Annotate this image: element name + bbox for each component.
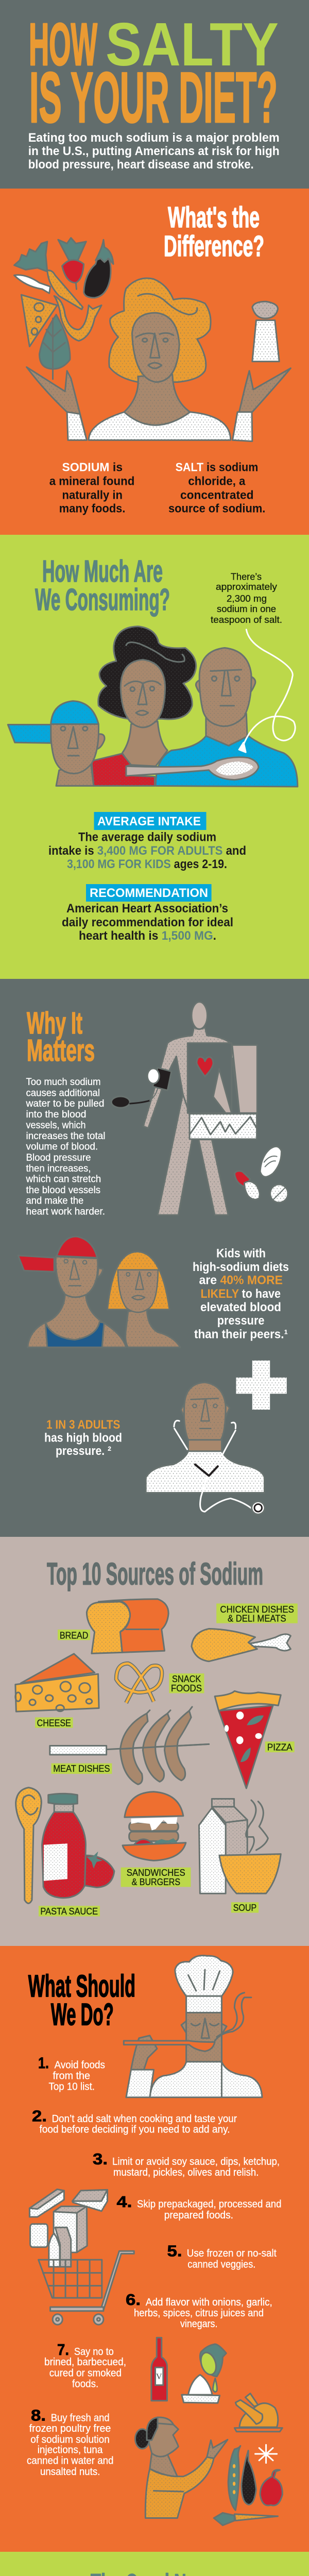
text: sodium definition: naturally in: [62, 488, 123, 501]
text: explanation: into the blood: [26, 1109, 87, 1120]
text: kids statistic: than their peers.¹: [194, 1327, 288, 1342]
heading: how much are we consuming: [35, 554, 170, 617]
heading: why it matters: [27, 1006, 95, 1067]
text: explanation: and make the: [26, 1195, 83, 1206]
callout: average intake: intake is 3,400 MG FOR ADULTS and: [48, 844, 246, 858]
step 1: 1.: [38, 2054, 49, 2072]
icon: salt shaker: [252, 301, 279, 362]
step 8: unsalted nuts.: [40, 2466, 100, 2478]
step 5: [167, 2242, 277, 2270]
text: explanation: which can stretch: [26, 1174, 101, 1185]
label: bread: BREAD: [60, 1630, 88, 1640]
text: kids statistic: Kids with: [216, 1247, 266, 1260]
illustration: family with spoon: [8, 626, 298, 787]
text: explanation: then increases,: [26, 1163, 91, 1174]
callout: teaspoon sodium: teaspoon of salt.: [211, 615, 282, 625]
step 1: Avoid foods: [55, 2059, 105, 2071]
illustration: chef tasting: [124, 1956, 262, 2097]
panel: why it matters: [0, 979, 309, 1537]
text: adults statistic: [44, 1418, 122, 1458]
icon: medical cross: [236, 1361, 287, 1410]
panel: what's the difference: [0, 189, 309, 535]
panel: the good news: [0, 2552, 309, 2576]
callout: recommendation: RECOMMENDATION: [90, 886, 208, 900]
icon: meat skewer: [50, 1707, 209, 1784]
step 2: [32, 2107, 237, 2136]
step 6: vinegars.: [180, 2318, 217, 2330]
text: kids statistic: pressure: [217, 1314, 265, 1328]
heading: what's the difference: [164, 201, 264, 263]
callout: average intake: The average daily sodium: [78, 831, 216, 844]
label: pasta sauce: PASTA SAUCE: [40, 1906, 98, 1917]
step 6: 6.: [126, 2291, 141, 2309]
step 6: [126, 2291, 272, 2330]
callout: teaspoon sodium: 2,300 mg: [227, 594, 267, 604]
intro text: [28, 131, 280, 172]
step 4: Skip prepackaged, processed and: [137, 2198, 281, 2210]
heading: how much are we consuming: How Much Are: [42, 554, 163, 588]
callout: teaspoon sodium: There’s: [231, 572, 262, 582]
label: snack foods: FOODS: [171, 1683, 202, 1693]
step 3: 3.: [93, 2150, 108, 2168]
step 6: Add flavor with onions, garlic,: [146, 2296, 272, 2308]
arrow: squiggle to spoon: [239, 630, 295, 752]
step 7: Say no to: [74, 2346, 114, 2358]
text: adults statistic: pressure. ²: [56, 1444, 111, 1458]
text: salt definition: [168, 461, 265, 515]
label: soup: SOUP: [233, 1903, 256, 1913]
label: sandwiches and burgers: & BURGERS: [132, 1877, 180, 1887]
text: sodium definition: [49, 461, 134, 515]
step 1: Top 10 list.: [48, 2080, 95, 2093]
label: snack foods: [169, 1673, 204, 1693]
step 8: Buy fresh and: [51, 2412, 110, 2424]
illustration: doctor with stethoscope: [146, 1382, 265, 1514]
heading: why it matters: Why It: [27, 1006, 82, 1040]
icon: soup and carton: [199, 1799, 281, 1893]
label: sandwiches and burgers: SANDWICHES: [127, 1868, 185, 1878]
icon: burger: [123, 1792, 186, 1860]
text: kids statistic: elevated blood: [200, 1300, 281, 1314]
step 4: prepared foods.: [164, 2209, 233, 2221]
step 2: Don’t add salt when cooking and taste your: [52, 2113, 237, 2125]
icon: bread: [87, 1599, 168, 1653]
title: [29, 10, 279, 138]
intro text: Eating too much sodium is a major problem: [28, 131, 280, 145]
step 2: 2.: [32, 2107, 47, 2125]
icon: frozen vegetables: [214, 2445, 282, 2526]
icon: vinegar bottle: [151, 2337, 167, 2401]
panel: how much are we consuming: [0, 535, 309, 979]
callout: average intake: [48, 812, 246, 871]
step 6: herbs, spices, citrus juices and: [134, 2307, 264, 2319]
callout: teaspoon sodium: [211, 572, 282, 625]
step 5: Use frozen or no-salt: [187, 2247, 277, 2259]
step 1: from the: [53, 2070, 90, 2082]
step 7: [44, 2341, 126, 2390]
step 8: of sodium solution: [30, 2433, 110, 2445]
heading: why it matters: Matters: [27, 1033, 95, 1067]
callout: average intake: 3,100 MG FOR KIDS ages 2-19.: [67, 857, 227, 871]
text: kids statistic: are 40% MORE: [199, 1274, 283, 1287]
text: explanation: [26, 1076, 105, 1217]
text: sodium definition: a mineral found: [49, 474, 134, 487]
step 7: cured or smoked: [49, 2367, 122, 2379]
step 3: Limit or avoid soy sauce, dips, ketchup,: [112, 2156, 280, 2167]
step 7: foods.: [72, 2378, 98, 2390]
heading: what should we do: What Should: [28, 1969, 135, 2003]
panel: top 10 sources: [0, 1537, 309, 1946]
text: kids statistic: high-sodium diets: [193, 1260, 289, 1274]
text: sodium definition: many foods.: [59, 502, 125, 515]
illustration: woman shopping profile: [135, 2417, 228, 2518]
icon: natural foods: [14, 238, 113, 379]
intro text: blood pressure, heart disease and stroke.: [28, 158, 254, 172]
step 3: mustard, pickles, olives and relish.: [113, 2166, 259, 2178]
text: adults statistic: has high blood: [44, 1431, 122, 1445]
heading: how much are we consuming: We Consuming?: [35, 583, 170, 617]
step 1: [38, 2054, 105, 2093]
icon: pasta sauce with spoon and tomato: [16, 1788, 114, 1903]
text: explanation: water to be pulled: [26, 1098, 104, 1109]
icon: vinegar bottle: V: [156, 2372, 162, 2381]
icon: cheese: [15, 1654, 99, 1711]
heading: what should we do: We Do?: [51, 1997, 114, 2032]
callout: teaspoon sodium: approximately: [216, 582, 277, 592]
illustration: shopping cart: [29, 2189, 134, 2325]
label: snack foods: SNACK: [172, 1674, 201, 1684]
step 5: 5.: [167, 2242, 182, 2260]
text: salt definition: SALT is sodium: [176, 461, 258, 474]
illustration: kids: [18, 1236, 180, 1347]
step 8: [27, 2406, 113, 2478]
text: explanation: volume of blood.: [26, 1141, 98, 1152]
step 8: 8.: [31, 2406, 46, 2425]
step 8: canned in water and: [27, 2455, 113, 2467]
callout: recommendation: American Heart Association’s: [66, 902, 228, 916]
label: sandwiches and burgers: [121, 1868, 191, 1887]
label: chicken dishes and deli meats: [216, 1603, 298, 1624]
text: sodium definition: SODIUM is: [62, 461, 123, 474]
step 2: food before deciding if you need to add any.: [39, 2124, 230, 2136]
icon: lime and juicer: [182, 2344, 226, 2403]
text: adults statistic: 1 IN 3 ADULTS: [46, 1418, 120, 1432]
icon: roast turkey: [234, 2394, 282, 2432]
panel: title header: [0, 0, 309, 189]
label: meat dishes: MEAT DISHES: [53, 1764, 110, 1774]
callout: recommendation: [62, 884, 233, 943]
icon: pretzel: [116, 1664, 162, 1703]
text: explanation: the blood vessels: [26, 1184, 100, 1196]
icon: pills: [234, 1146, 288, 1202]
heading: what should we do: [28, 1969, 135, 2032]
title: HOW: [29, 11, 97, 78]
icon: pizza slice: [215, 1691, 281, 1788]
text: kids statistic: LIKELY to have: [201, 1287, 281, 1301]
illustration: woman juggling: [27, 278, 290, 441]
intro text: in the U.S., putting Americans at risk for high: [28, 144, 280, 158]
label: chicken dishes and deli meats: CHICKEN DISHES: [220, 1604, 294, 1615]
step 4: [116, 2193, 281, 2221]
text: kids statistic: [193, 1247, 289, 1342]
text: explanation: Blood pressure: [26, 1152, 91, 1163]
step 4: 4.: [116, 2193, 132, 2211]
icon: chicken drumstick: [192, 1629, 290, 1662]
title: SALTY: [106, 10, 279, 79]
step 5: canned veggies.: [187, 2258, 255, 2270]
callout: average intake: AVERAGE INTAKE: [97, 815, 201, 828]
label: cheese: CHEESE: [37, 1718, 71, 1728]
text: salt definition: source of sodium.: [168, 502, 265, 515]
text: explanation: heart work harder.: [26, 1206, 105, 1217]
step 3: [93, 2150, 280, 2178]
step 8: injections, tuna: [38, 2444, 103, 2455]
panel: what should we do: [0, 1946, 309, 2552]
text: salt definition: concentrated: [180, 488, 253, 501]
callout: recommendation: daily recommendation for ideal: [62, 916, 233, 929]
illustration: body with blood pressure cuff: [111, 1002, 257, 1215]
step 8: frozen poultry free: [29, 2422, 111, 2434]
text: explanation: vessels, which: [26, 1120, 85, 1131]
text: explanation: increases the total: [26, 1130, 105, 1142]
callout: recommendation: heart health is 1,500 MG.: [79, 929, 216, 943]
text: explanation: causes additional: [26, 1087, 100, 1098]
label: chicken dishes and deli meats: & DELI MEATS: [228, 1614, 286, 1624]
step 7: brined, barbecued,: [44, 2356, 126, 2368]
text: salt definition: chloride, a: [188, 474, 246, 487]
callout: teaspoon sodium: sodium in one: [217, 604, 276, 614]
text: explanation: Too much sodium: [26, 1076, 101, 1088]
label: pizza: PIZZA: [267, 1742, 293, 1753]
step 7: 7.: [57, 2341, 69, 2359]
